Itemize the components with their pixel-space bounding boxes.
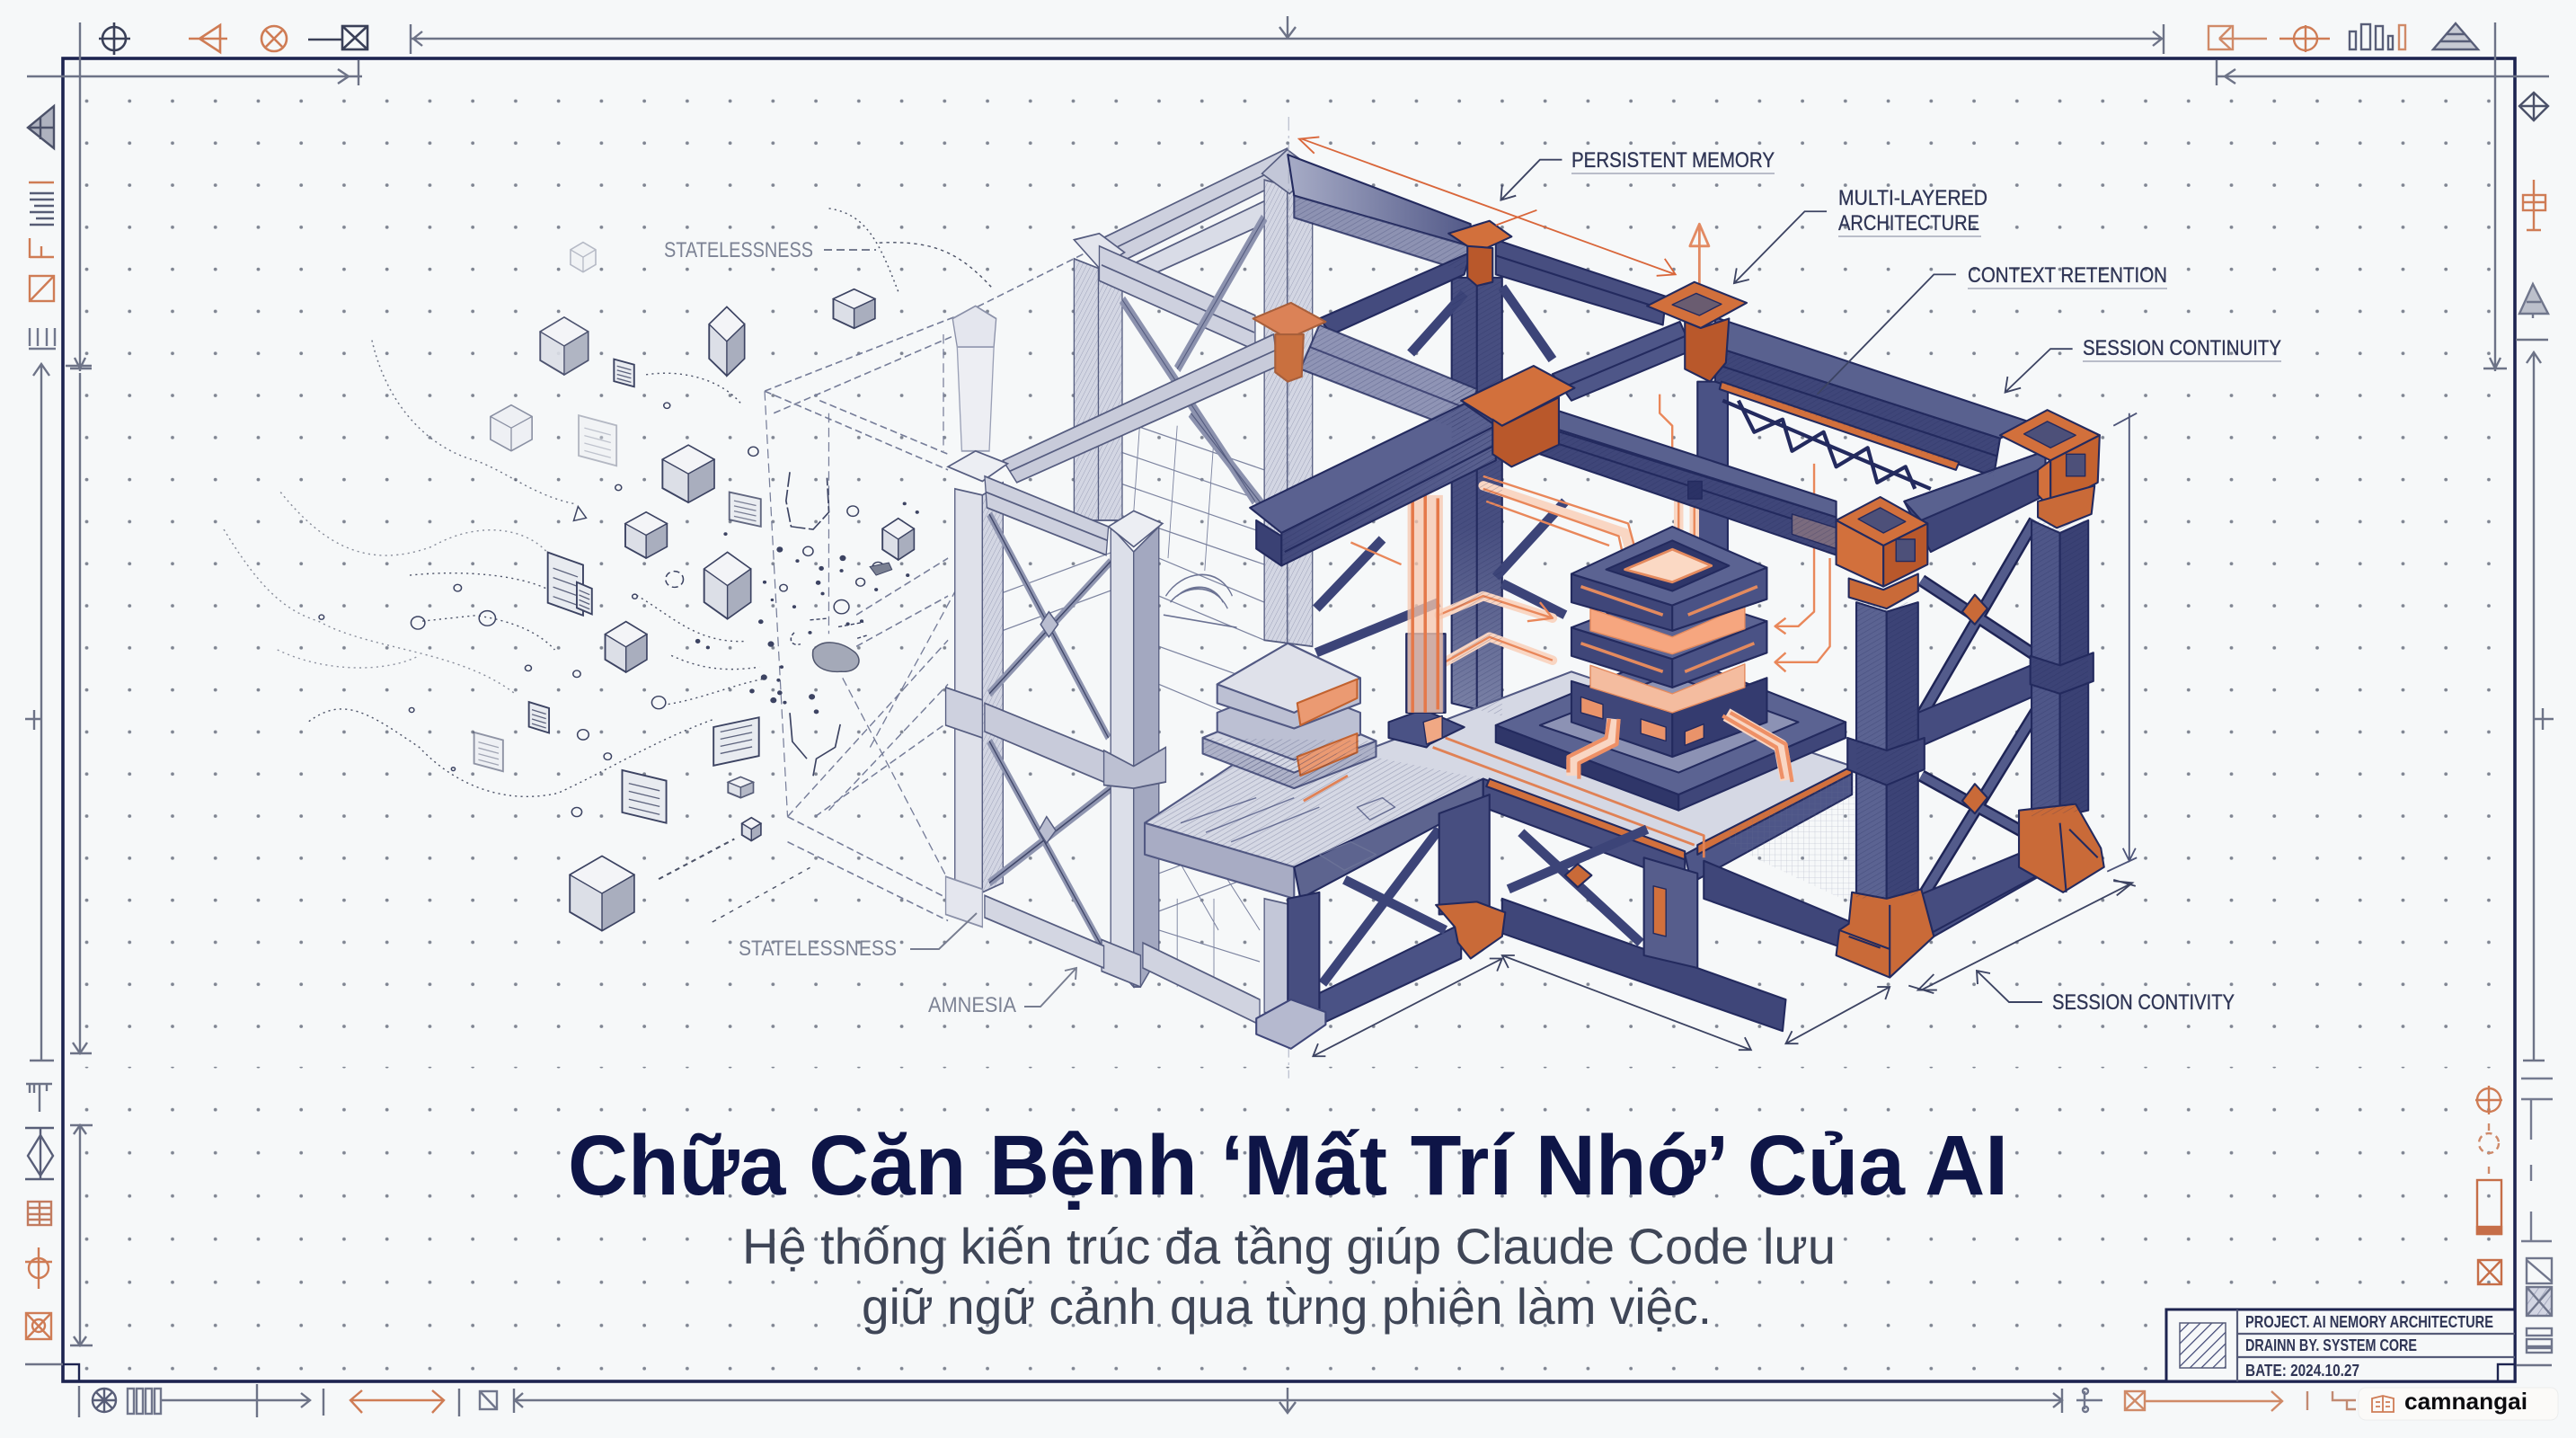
icon: orange arrow mark [189, 25, 227, 52]
icon: gem triangle [28, 106, 54, 148]
ghost floor hatching [994, 401, 1264, 999]
orange energy pipes rear [1350, 395, 1830, 671]
icon: hatched triangle [2433, 23, 2478, 49]
ghost machine sketch [1164, 574, 1237, 627]
back right column [2032, 520, 2060, 817]
core layer 2 [1571, 621, 1766, 688]
ghost center axis [1288, 117, 1289, 1078]
dotted memory trails [224, 209, 993, 922]
subtitle: Hệ thống kiến trúc đa tầng giúp Claude Code lưu [742, 1218, 1836, 1274]
leader: persistent memory [1500, 160, 1562, 200]
orange up arrow [1690, 224, 1709, 306]
icon: crossed box [308, 26, 367, 49]
front right base [1837, 889, 1934, 978]
icon: orange T mark [29, 182, 54, 258]
disintegrating blob [791, 563, 892, 671]
icon: globe [93, 1389, 116, 1412]
title block text: DRAINN BY. SYSTEM CORE [2245, 1336, 2417, 1354]
icon: vertical bars [30, 193, 54, 225]
joint: rear top [1448, 221, 1511, 286]
icon: small box [480, 1391, 497, 1409]
margin icons: right column [2475, 93, 2553, 1353]
icon: orange crossed box [26, 1313, 51, 1339]
steel hatching texture [1145, 196, 2088, 899]
front right column [1856, 602, 1887, 901]
orange dimension arrow along top beam [1299, 137, 1676, 276]
lower bay braces [1323, 830, 1647, 984]
ghost back frame [1099, 148, 1292, 268]
label: context retention: CONTEXT RETENTION [1968, 263, 2167, 288]
core layer 1 [1571, 568, 1766, 631]
icon: orange arrow box [2125, 1391, 2282, 1411]
beam: center joint to corner [1553, 322, 1693, 401]
dimension lines and leaders [1299, 137, 2137, 1056]
orange energy pipes rear glow [1439, 470, 1695, 665]
leader: multi-layered [1734, 211, 1827, 283]
icon: crosshair diamond [2519, 93, 2548, 120]
ghost front columns [948, 451, 1007, 481]
joint: tall corner [1647, 282, 1747, 382]
icon: USB mark [2076, 1389, 2102, 1412]
leader: session contivity lower [1977, 971, 2042, 1002]
icon: open book [2372, 1396, 2394, 1412]
watermark badge: camnangai [2404, 1388, 2527, 1415]
icon: orange target bottom [2475, 1086, 2502, 1114]
leader: statelessness top [824, 249, 876, 251]
icon: hatch strips [2527, 1258, 2552, 1353]
bottom mid dimension [1785, 987, 1890, 1043]
rear cross beam [1319, 253, 1471, 334]
ghost dashed outline frame [765, 246, 1099, 920]
title block text [2245, 1313, 2493, 1380]
icon: orange sun [25, 1247, 52, 1289]
lower beams [1502, 899, 1785, 1031]
label: amnesia: AMNESIA [928, 993, 1016, 1017]
bottom right dimension [1908, 880, 2136, 993]
core base pipes [1573, 715, 1787, 780]
margin icons: bottom row [93, 1389, 2356, 1414]
leader: session continuity [2005, 349, 2073, 393]
icon: hatched square [2180, 1323, 2226, 1368]
bottom long dimension [1502, 955, 1751, 1050]
label: persistent memory: PERSISTENT MEMORY [1571, 148, 1775, 173]
joint: center front [1461, 366, 1574, 466]
crumbling pipe fragments [786, 472, 840, 776]
icon: T post [26, 1084, 52, 1112]
main isometric steel structure [1145, 155, 2104, 1049]
icon: section marks [2521, 1078, 2553, 1241]
ghost structure: dissolving frame [765, 117, 1315, 1078]
label: multi-layered architecture [1838, 186, 1987, 236]
bottom left dimension [1313, 959, 1502, 1056]
icon: crosshair [99, 22, 130, 55]
margin icons: top left [99, 22, 367, 55]
icon: orange double arrow [350, 1390, 444, 1413]
front cantilever I-beam [1250, 404, 1496, 533]
icon: four bars [128, 1389, 161, 1414]
joint: back right corner [2000, 410, 2100, 528]
icon: orange box arrow [2209, 26, 2267, 49]
leader: context retention [1818, 274, 1956, 395]
callout labels [1571, 148, 2281, 1015]
front top beam [1546, 407, 1837, 517]
ghost labels [664, 238, 1016, 1017]
icon: hatched tree triangle [2519, 284, 2548, 318]
margin icons: left column [25, 106, 56, 1339]
brace node and mid base joint [1565, 864, 1591, 887]
center core stack [1496, 527, 1846, 811]
label: statelessness bottom: STATELESSNESS [739, 936, 897, 961]
label: session contivity: SESSION CONTIVITY [2052, 990, 2235, 1015]
subtitle: giữ ngữ cảnh qua từng phiên làm việc. [862, 1278, 1712, 1335]
joint: front right large corner [1837, 497, 1927, 608]
label: multi-layered architecture: ARCHITECTURE [1838, 211, 1979, 235]
floor platform [1145, 671, 1852, 867]
label: statelessness top: STATELESSNESS [664, 238, 813, 262]
margin icons: top right [2209, 23, 2478, 52]
icon: orange grid [28, 1202, 51, 1225]
core base slab [1496, 652, 1846, 794]
icon: bars [2350, 24, 2405, 49]
right long beam [1715, 317, 2032, 439]
title block text: BATE: 2024.10.27 [2245, 1362, 2359, 1380]
watermark badge [2359, 1388, 2558, 1420]
icon: orange slashed square [30, 276, 54, 301]
center rear column [1452, 278, 1502, 715]
floor orange guide lines [1304, 738, 1704, 857]
title block text: PROJECT. AI NEMORY ARCHITECTURE [2245, 1313, 2493, 1331]
ghost cross beam [1300, 324, 1477, 432]
rear beam: from far corner to corner joint [1288, 155, 1471, 246]
debris: floating memory fragments [224, 209, 993, 931]
core glow 1 [1590, 606, 1745, 654]
label: multi-layered architecture: MULTI-LAYERED [1838, 186, 1987, 210]
rear braces [1316, 287, 1565, 652]
joint: ghost-side top [1253, 303, 1325, 382]
cubes [474, 243, 914, 931]
left small stack [1203, 644, 1376, 788]
title block [2166, 1309, 2515, 1381]
icon: orange target [2279, 25, 2330, 52]
vertical height dimension [2107, 413, 2137, 872]
label: session continuity: SESSION CONTINUITY [2083, 336, 2281, 360]
orange truss with webbing [1720, 382, 1959, 470]
icon: orange post [2523, 180, 2545, 230]
leader: statelessness bottom [910, 913, 977, 949]
icon: diamond with ticks [25, 1128, 54, 1179]
ghost joint far [952, 306, 996, 360]
right bay braces [1921, 520, 2041, 899]
icon: orange cylinder rectangle [2477, 1180, 2501, 1234]
icon: orange crossed square [2478, 1260, 2501, 1284]
core layer 3 [1571, 678, 1766, 757]
icon: comb [29, 328, 56, 349]
pipe shaft pedestal and vertical conduits [1389, 495, 1465, 748]
icon: tick marks [2307, 1391, 2356, 1410]
lower columns [1439, 794, 1490, 914]
scattered particles [319, 403, 884, 817]
leader: amnesia [1024, 968, 1076, 1007]
title: Chữa Căn Bệnh ‘Mất Trí Nhớ’ Của AI [568, 1118, 2008, 1213]
icon: orange dashed circle [2479, 1123, 2499, 1174]
right return beam [1904, 451, 2045, 552]
core glow 2 [1590, 664, 1745, 713]
icon: orange circled cross [261, 26, 287, 51]
subtitle [742, 1218, 1836, 1335]
back right base [2019, 804, 2104, 892]
